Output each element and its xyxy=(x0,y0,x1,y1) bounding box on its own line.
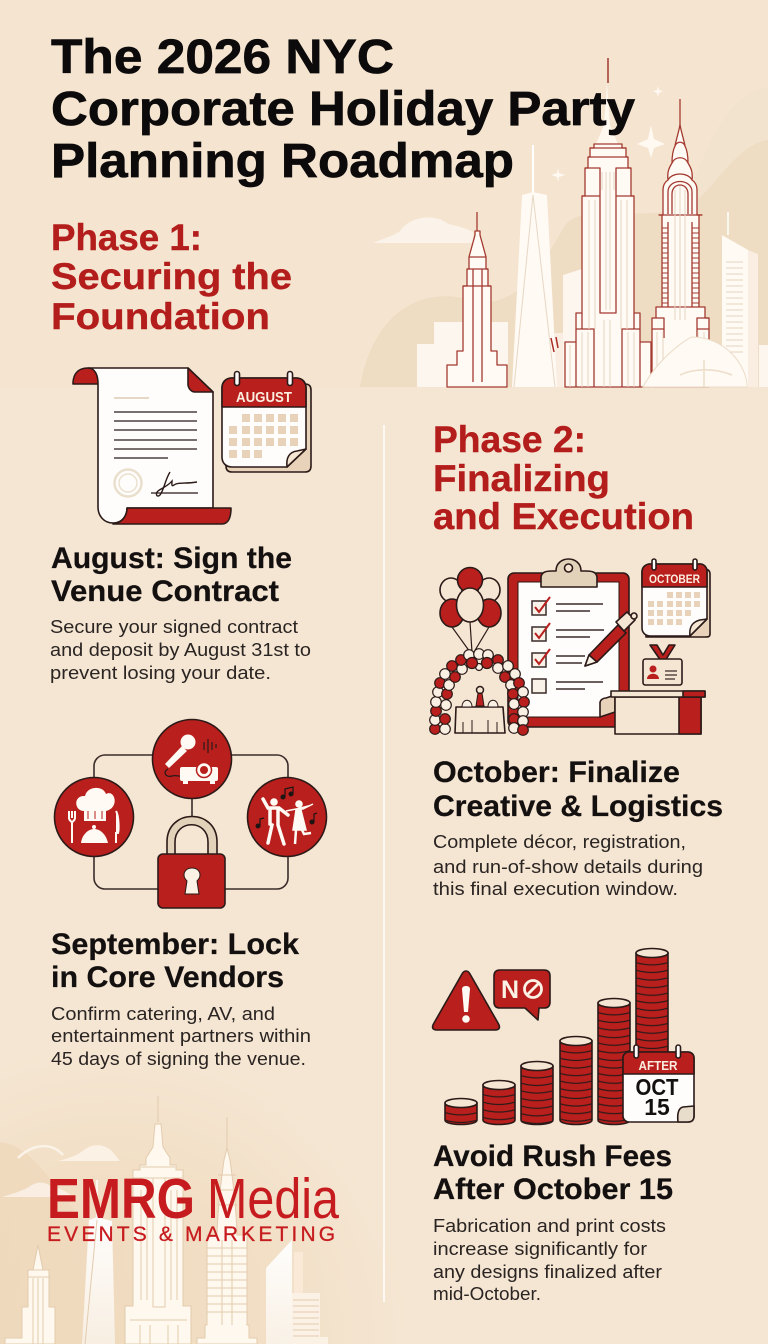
chrysler building xyxy=(652,99,709,387)
text: august sign the venue contract: and deposit by August 31st to xyxy=(50,640,311,660)
heading: phase 2: and Execution xyxy=(433,496,694,537)
text: august sign the venue contract: Secure your signed contract xyxy=(50,617,298,637)
oculus arch xyxy=(643,337,747,387)
cloud xyxy=(373,217,473,243)
text: august sign the venue contract: August: Sign the xyxy=(51,542,292,575)
header skyline panel xyxy=(0,0,768,387)
heading: phase 1: Phase 1: xyxy=(51,217,202,258)
icon: no speech bubble xyxy=(494,970,550,1020)
background blocks xyxy=(417,268,585,387)
icon: vendors locked together xyxy=(54,720,326,908)
footer right towers xyxy=(266,1240,328,1344)
text: october finalize creative and logistics: October: Finalize xyxy=(433,756,680,789)
icon: october calendar xyxy=(642,559,710,637)
text: avoid rush fees after october 15: After October 15 xyxy=(433,1173,673,1206)
audio visual circle xyxy=(152,720,232,798)
text: september lock in core vendors: entertainment partners within xyxy=(51,1026,311,1046)
text: october finalize creative and logistics: this final execution window. xyxy=(433,879,678,899)
icon: signed contract xyxy=(73,368,231,524)
title: Corporate Holiday Party xyxy=(51,83,635,136)
heading: phase 1 xyxy=(51,217,292,337)
icon: balloons and arch xyxy=(430,568,529,735)
footer small empire state xyxy=(5,1245,55,1344)
one world trade center xyxy=(512,145,558,387)
gift table xyxy=(455,707,505,733)
icon: after oct 15 calendar: AFTER xyxy=(638,1058,678,1073)
icon: august calendar xyxy=(222,372,311,472)
icon: august calendar: AUGUST xyxy=(236,390,292,406)
text: october finalize creative and logistics: and run-of-show details during xyxy=(433,857,703,877)
text: august sign the venue contract: Venue Contract xyxy=(51,575,279,608)
icon: registration desk and badge xyxy=(611,645,705,734)
text: september lock in core vendors: September: Lock xyxy=(51,928,299,961)
logo: EMRG Media: EMRG xyxy=(47,1167,195,1231)
icon: after oct 15 calendar: 15 xyxy=(644,1094,670,1120)
entertainment circle xyxy=(248,778,326,856)
footer skyline background xyxy=(0,1044,410,1344)
title: Planning Roadmap xyxy=(51,135,514,188)
chart: rising coin stacks xyxy=(445,948,668,1124)
text: september lock in core vendors: Confirm catering, AV, and xyxy=(51,1004,275,1024)
logo: EMRG Media xyxy=(47,1167,339,1246)
icon: after oct 15 calendar: OCT xyxy=(636,1074,678,1100)
right tower xyxy=(722,212,768,387)
logo: EMRG Media: EVENTS & MARKETING xyxy=(47,1223,338,1246)
heading: phase 2: Phase 2: xyxy=(433,419,586,460)
text: avoid rush fees after october 15: mid-October. xyxy=(433,1284,541,1304)
footer empire state xyxy=(125,1096,191,1344)
text: avoid rush fees after october 15 xyxy=(433,1140,673,1304)
sparkles xyxy=(551,86,665,182)
text: avoid rush fees after october 15: Fabrication and print costs xyxy=(433,1216,666,1236)
text: october finalize creative and logistics: Complete décor, registration, xyxy=(433,832,686,852)
footer chrysler xyxy=(197,1117,257,1344)
heading: phase 2 xyxy=(433,419,694,537)
padlock xyxy=(158,816,225,908)
logo: EMRG Media: Media xyxy=(207,1167,339,1231)
text: avoid rush fees after october 15: any designs finalized after xyxy=(433,1262,662,1282)
icon: warning triangle xyxy=(433,971,499,1030)
icon: october calendar: OCTOBER xyxy=(649,574,701,586)
text: avoid rush fees after october 15: Avoid Rush Fees xyxy=(433,1140,672,1173)
center divider xyxy=(383,425,385,1302)
icon: after oct 15 calendar xyxy=(623,1045,694,1122)
icon: checklist clipboard xyxy=(508,559,637,727)
heading: phase 1: Foundation xyxy=(51,296,270,337)
catering circle xyxy=(54,778,134,856)
text: october finalize creative and logistics xyxy=(433,756,723,899)
small empire state building xyxy=(447,212,507,387)
heading: phase 1: Securing the xyxy=(51,256,292,297)
text: september lock in core vendors: 45 days of signing the venue. xyxy=(51,1049,306,1069)
icon: no speech bubble: N xyxy=(501,976,519,1004)
footer one world trade center xyxy=(82,1180,115,1344)
text: september lock in core vendors xyxy=(51,928,311,1069)
text: august sign the venue contract xyxy=(50,542,311,683)
text: september lock in core vendors: in Core Vendors xyxy=(51,961,284,994)
text: october finalize creative and logistics: Creative & Logistics xyxy=(433,790,723,823)
text: avoid rush fees after october 15: increase significantly for xyxy=(433,1239,647,1259)
pen xyxy=(585,625,626,666)
title: The 2026 NYC xyxy=(51,31,394,84)
heading: phase 2: Finalizing xyxy=(433,458,610,499)
text: august sign the venue contract: prevent losing your date. xyxy=(50,663,271,683)
empire state building xyxy=(565,58,651,387)
title xyxy=(51,31,635,188)
